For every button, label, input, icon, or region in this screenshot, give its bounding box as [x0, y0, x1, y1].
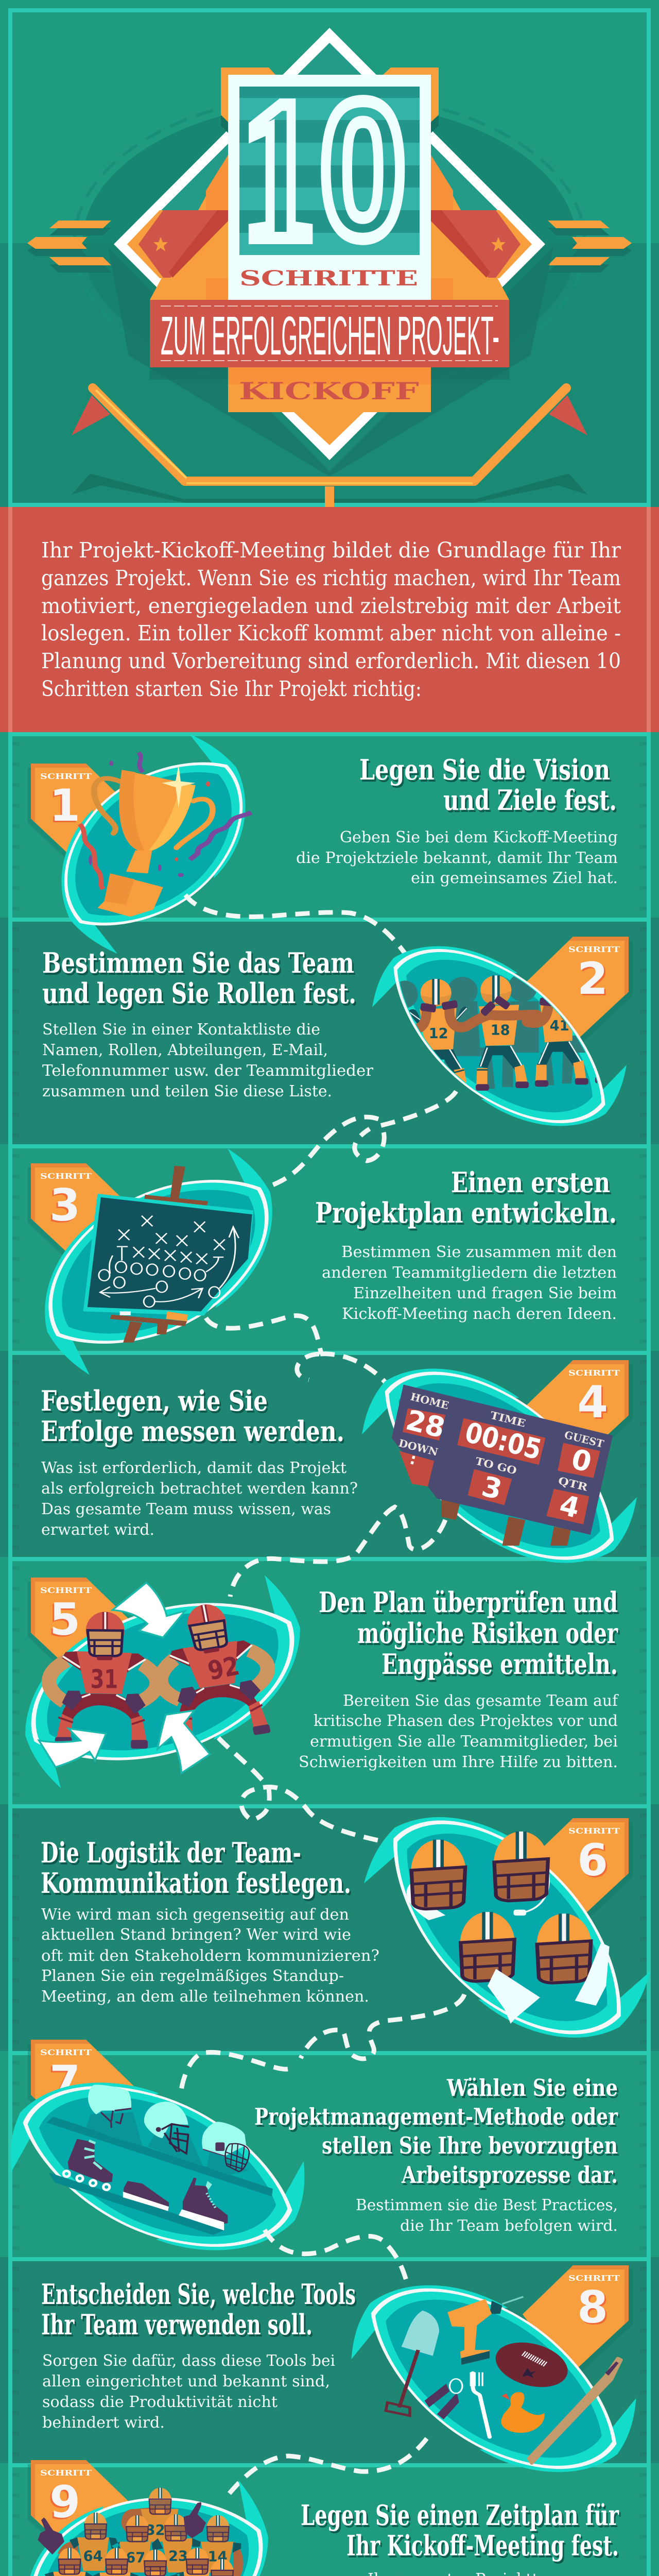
right ribbon: [431, 210, 532, 278]
illustration: players with arrows: [0, 1552, 328, 1811]
left ribbon: [127, 210, 228, 278]
text: step 6: Die Logistik der Team-: [41, 1836, 301, 1869]
text: step 3: anderen Teammitgliedern die letzten: [322, 1264, 617, 1282]
text: step 8: behindert wird.: [42, 2414, 165, 2432]
heading: Schritte: SCHRITTE: [239, 266, 418, 291]
step badge 6: [523, 1818, 633, 1933]
step badge 5: 5: [49, 1594, 80, 1646]
text: step 6: Wie wird man sich gegenseitig auf den: [41, 1906, 349, 1924]
text: step 1: [296, 753, 618, 887]
goalpost shadow: [72, 473, 587, 503]
text: step 2: Namen, Rollen, Abteilungen, E-Mail,: [42, 1041, 328, 1059]
number 10: 1: [241, 58, 316, 282]
section backgrounds: [0, 732, 659, 2576]
intro text: ganzes Projekt. Wenn Sie es richtig machen, wird Ihr Team: [41, 566, 621, 590]
illustration: team photo: 32: [146, 2522, 165, 2538]
step badge 8: 8: [577, 2282, 608, 2333]
dashed path 6: [181, 1994, 464, 2094]
illustration: scoreboard: QTR: [557, 1475, 589, 1494]
illustration: scoreboard: 4: [557, 1488, 583, 1524]
illustration: linked players: 18: [491, 1022, 510, 1038]
dashed path 8: [227, 2438, 427, 2496]
icon: right chevrons: [548, 221, 632, 273]
step badge 9: [28, 2460, 136, 2575]
back row: [122, 2507, 154, 2538]
player 41: [537, 1042, 583, 1066]
illustration: players with arrows: 31: [91, 1665, 118, 1694]
text: step 2: Telefonnummer usw. der Teammitglieder: [42, 1062, 374, 1080]
text: step 7: Wählen Sie eine: [446, 2074, 618, 2102]
illustration: play chalkboard: [10, 1127, 307, 1397]
step badge 7: [28, 2040, 136, 2155]
illustration: scoreboard: 00:05: [462, 1416, 545, 1466]
intro text: [41, 538, 621, 701]
text: step 8: allen eingerichtet und bekannt sind,: [42, 2372, 330, 2391]
text: step 5: [299, 1586, 619, 1771]
intro text: Ihr Projekt-Kickoff-Meeting bildet die Grundlage für Ihr: [41, 538, 621, 563]
red title banner: [150, 300, 509, 367]
text: step 3: Kickoff-Meeting nach deren Ideen.: [342, 1305, 617, 1323]
text: step 6: Planen Sie ein regelmäßiges Standup-: [41, 1967, 344, 1985]
illustration: team photo: 64: [83, 2549, 103, 2565]
text: step 7: die Ihr Team befolgen wird.: [400, 2217, 618, 2235]
text: step 7: Arbeitsprozesse dar.: [401, 2161, 618, 2189]
text: step 4: Das gesamte Team muss wissen, was: [41, 1500, 331, 1518]
dashed path 7: [265, 2230, 408, 2286]
text: step 4: Erfolge messen werden.: [41, 1415, 344, 1448]
step badge 8: [523, 2265, 633, 2380]
step badge 4: [523, 1360, 633, 1475]
striped panel: [239, 87, 420, 255]
text: step 7: Bestimmen sie die Best Practices,: [356, 2196, 618, 2214]
illustration: helmets top view: [342, 1775, 659, 2079]
icon: red flags: [72, 395, 587, 435]
step badge 6: 6: [577, 1835, 608, 1886]
step badge 9: SCHRITT: [40, 2468, 92, 2478]
illustration: scoreboard: 28: [403, 1403, 448, 1445]
panel: intro: [0, 507, 659, 732]
hands: [38, 2518, 64, 2554]
step badge 1: [28, 764, 136, 878]
step badge 6: SCHRITT: [568, 1826, 620, 1836]
text: step 1: ein gemeinsames Ziel hat.: [411, 869, 618, 887]
header panel: [0, 0, 659, 507]
illustration: linked players: 41: [550, 1018, 569, 1034]
text: step 4: Was ist erforderlich, damit das Projekt: [41, 1459, 346, 1477]
text: step 8: Entscheiden Sie, welche Tools: [41, 2278, 356, 2311]
illustration: team photo: 14: [208, 2549, 228, 2565]
step badge 1: SCHRITT: [40, 772, 92, 781]
text: step 2: zusammen und teilen Sie diese Liste.: [42, 1082, 332, 1100]
text: step 5: Bereiten Sie das gesamte Team auf: [343, 1692, 619, 1710]
step badge 3: [28, 1163, 136, 1278]
step badge 7: SCHRITT: [40, 2048, 92, 2057]
illustration: scoreboard: [343, 1331, 656, 1600]
text: step 6: [41, 1836, 379, 2006]
illustration: scoreboard: 0: [568, 1443, 595, 1479]
step badge 1: 1: [49, 780, 80, 832]
intro text: Schritten starten Sie Ihr Projekt richtig:: [41, 676, 422, 701]
text: step 5: ermutigen Sie alle Teammitglieder, bei: [310, 1733, 618, 1751]
text: step 6: Kommunikation festlegen.: [41, 1867, 351, 1900]
text: step 6: oft mit den Stakeholdern kommunizieren?: [41, 1947, 379, 1965]
player 18: [479, 1046, 524, 1070]
illustration: scoreboard: 3: [479, 1470, 505, 1506]
step badge 7: 7: [49, 2056, 80, 2108]
text: step 1: Geben Sie bei dem Kickoff-Meeting: [340, 828, 618, 846]
icon: left chevrons: [27, 221, 111, 273]
text: step 4: als erfolgreich betrachtet werden kann?: [41, 1480, 358, 1498]
illustration: linked players: 12: [429, 1026, 448, 1042]
intro text: motiviert, energiegeladen und zielstrebig mit der Arbeit: [41, 594, 621, 618]
text: step 8: sodass die Produktivität nicht: [42, 2393, 278, 2411]
illustration: helmets and shoes shelf: [0, 2054, 320, 2279]
text: step 6: aktuellen Stand bringen? Wer wird wie: [41, 1926, 351, 1944]
front row: [40, 2576, 255, 2577]
step badge 4: SCHRITT: [568, 1368, 620, 1378]
illustration: scoreboard: TO GO: [474, 1455, 518, 1477]
step badge 9: 9: [49, 2477, 80, 2528]
text: step 2: [42, 946, 374, 1100]
text: step 2: und legen Sie Rollen fest.: [42, 977, 356, 1010]
text: step 1: die Projektziele bekannt, damit Ihr Team: [296, 849, 618, 867]
illustration: players with arrows: 92: [205, 1651, 242, 1686]
dashed path 2: [269, 1091, 456, 1187]
text: step 2: Bestimmen Sie das Team: [42, 946, 354, 979]
text: step 5: Schwierigkeiten um Ihre Hilfe zu bitten.: [299, 1753, 618, 1771]
step badge 8: SCHRITT: [568, 2274, 620, 2283]
dashed path 4: [230, 1507, 445, 1597]
player 12: [432, 1049, 461, 1079]
illustration: tools: [333, 2249, 655, 2509]
step badge 4: 4: [577, 1377, 608, 1428]
illustration: trophy on football: [27, 715, 280, 973]
illustration: scoreboard: GUEST: [563, 1429, 605, 1450]
number 10: 0: [320, 61, 406, 279]
arms: [408, 1001, 580, 1029]
text: step 8: Sorgen Sie dafür, dass diese Tools bei: [42, 2352, 335, 2370]
illustration: linked players: [372, 946, 627, 1126]
text: step 4: erwartet wird.: [41, 1521, 154, 1539]
text: step 3: [315, 1166, 617, 1323]
badge emblem: [108, 28, 553, 477]
illustration: team photo: 67: [126, 2550, 145, 2566]
illustration: scoreboard: :: [408, 1450, 418, 1469]
step badge 2: SCHRITT: [568, 945, 620, 954]
dashed path 1: [185, 895, 410, 960]
text: step 4: Festlegen, wie Sie: [41, 1384, 268, 1417]
number 10: [241, 58, 406, 282]
illustration: team photo: 23: [168, 2549, 188, 2565]
text: step 3: Bestimmen Sie zusammen mit den: [341, 1243, 617, 1261]
text: step 9: [301, 2499, 619, 2576]
step badge 3: SCHRITT: [40, 1172, 92, 1181]
step badge 2: [523, 937, 633, 1052]
heading: Kickoff: KICKOFF: [239, 377, 419, 405]
text: step 5: kritische Phasen des Projektes vor und: [314, 1712, 618, 1730]
white jersey card: [228, 75, 431, 300]
text: step 2: Stellen Sie in einer Kontaktliste die: [42, 1021, 320, 1039]
text: step 4: [41, 1384, 358, 1539]
dashed path 5: [218, 1738, 383, 1841]
illustration: scoreboard: DOWN: [397, 1437, 439, 1459]
text: step 7: [254, 2074, 618, 2235]
text: step 6: Meeting, an dem alle teilnehmen können.: [41, 1988, 369, 2006]
step badge 5: [28, 1578, 136, 1692]
step badge 5: SCHRITT: [40, 1586, 92, 1595]
intro text: Planung und Vorbereitung sind erforderlich. Mit diesen 10: [41, 649, 621, 673]
illustration: scoreboard: TIME: [489, 1409, 527, 1430]
text: step 8: Ihr Team verwenden soll.: [41, 2308, 313, 2341]
text: step 3: Einen ersten: [451, 1166, 610, 1199]
intro text: loslegen. Ein toller Kickoff kommt aber nicht von alleine -: [41, 621, 621, 646]
text: step 8: [41, 2278, 356, 2432]
icon: goalpost: [93, 388, 566, 507]
step badge 2: 2: [577, 953, 608, 1005]
lower orange tab: [228, 367, 431, 460]
step badge 3: 3: [49, 1180, 80, 1231]
dashed path 3: [206, 1316, 387, 1384]
illustration: team photo: [2, 2456, 291, 2576]
text: step 3: Einzelheiten und fragen Sie beim: [353, 1284, 617, 1302]
illustration: scoreboard: HOME: [409, 1391, 450, 1412]
